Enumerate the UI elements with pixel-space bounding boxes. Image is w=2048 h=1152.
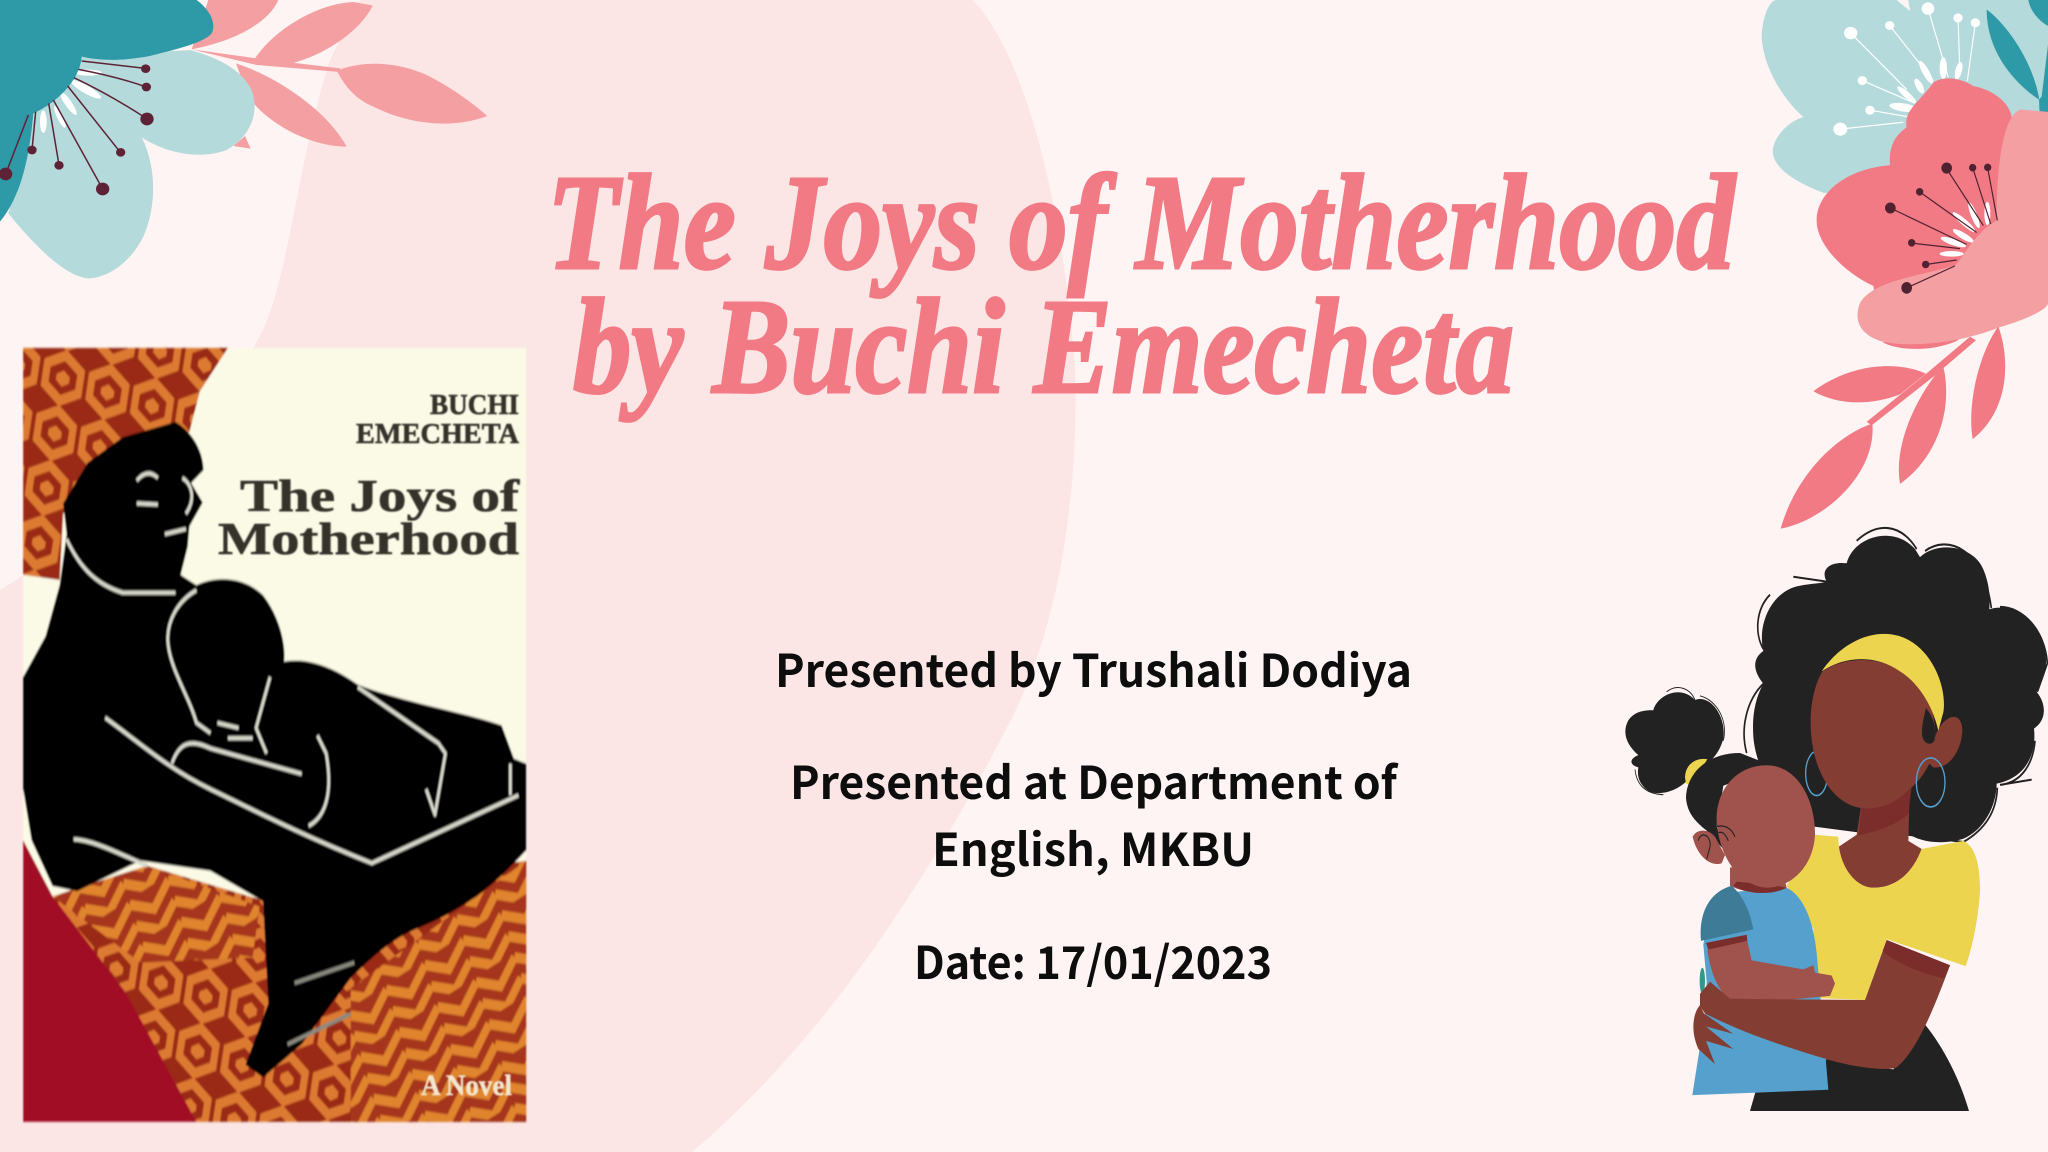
child sleeve	[1701, 886, 1753, 941]
title line 2: by Buchi Emecheta	[573, 272, 1514, 422]
child head	[1717, 765, 1815, 888]
dark stamens	[1890, 168, 1997, 288]
coral petals	[1817, 78, 2012, 349]
pale blue petals	[8, 50, 255, 278]
teal petal	[0, 0, 213, 222]
date: Date: 17/01/2023	[914, 927, 1272, 992]
arm shadow	[1883, 940, 1950, 978]
cover author name: BUCHI	[430, 389, 519, 421]
teal leaves	[1987, 0, 2048, 128]
illustration: mother and child	[1625, 526, 2048, 1111]
pale coral petal	[1858, 110, 2048, 344]
cover tagline: A Novel	[421, 1069, 512, 1102]
right earring	[1916, 758, 1945, 807]
mother arm	[1700, 940, 1950, 1069]
child neck	[1730, 867, 1787, 893]
neck shadow	[1858, 786, 1912, 836]
mother neck	[1838, 782, 1922, 888]
sideburn	[1922, 708, 1935, 744]
hair tie	[1685, 759, 1707, 786]
mother ear	[1927, 717, 1962, 767]
mother hair	[1753, 536, 2046, 842]
flower: top right	[1762, 0, 2048, 529]
presenter details	[775, 635, 1412, 992]
child collar shadow	[1733, 882, 1787, 893]
notch	[1897, 0, 1910, 11]
bun strands	[1635, 688, 1725, 795]
cover title line 1: The Joys of	[240, 470, 520, 521]
title	[547, 148, 1737, 422]
dark stamens	[6, 61, 147, 189]
mother hand fingers	[1693, 1005, 1733, 1064]
coral leaves	[1781, 326, 2005, 529]
flower: top left	[0, 0, 488, 278]
yellow shirt	[1787, 835, 1980, 1000]
child arm	[1707, 941, 1835, 1000]
child ear	[1693, 831, 1725, 864]
department line 2: English, MKBU	[932, 814, 1254, 879]
child dress	[1692, 888, 1828, 1095]
cover title line 2: Motherhood	[218, 513, 519, 564]
child sleeve shadow	[1706, 935, 1747, 951]
cover author surname: EMECHETA	[356, 418, 519, 450]
white anthers	[1940, 201, 1990, 257]
white stamen bases	[40, 70, 103, 133]
mother face	[1811, 660, 1935, 808]
title line 1: The Joys of Motherhood	[547, 148, 1737, 298]
book cover	[23, 348, 526, 1122]
child ear and lash detail	[1698, 826, 1735, 859]
child hair bun	[1625, 692, 1724, 793]
leaves	[192, 0, 487, 149]
background blob	[0, 0, 1076, 1152]
child hair	[1686, 753, 1773, 851]
white stamens	[1840, 9, 1975, 129]
headband	[1822, 634, 1944, 731]
department line 1: Presented at Department of	[790, 747, 1399, 812]
black skirt	[1750, 1024, 1969, 1111]
hair strands	[1744, 528, 2047, 842]
left earring	[1806, 751, 1828, 796]
green detail	[1700, 968, 1705, 994]
presenter name: Presented by Trushali Dodiya	[775, 635, 1412, 700]
pale blue petals	[1762, 0, 2048, 193]
cover artwork	[22, 346, 528, 1124]
